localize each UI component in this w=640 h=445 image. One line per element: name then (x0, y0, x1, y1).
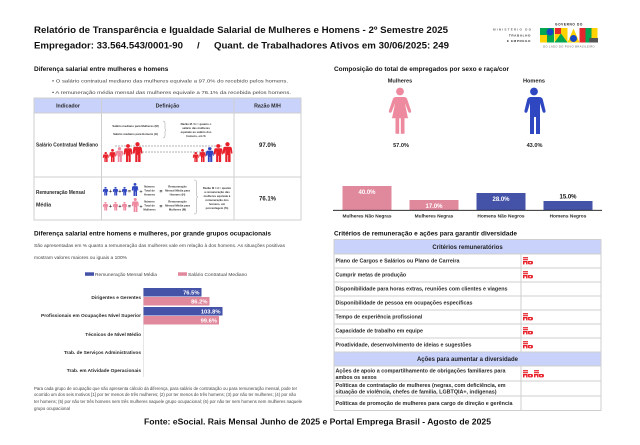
panel: proporção homens (523, 78, 546, 149)
diagram: remuneração média: Homens (H) (170, 192, 185, 196)
bar chart: ocupações (41, 288, 222, 377)
row label: remuneração: Média (36, 202, 51, 208)
value: 76,1%: 76.1% (259, 196, 277, 202)
bar chart: composição por raça/cor: 15.0% (559, 194, 577, 200)
bar chart: composição por raça/cor: 28.0% (492, 197, 510, 203)
icons: critérios adotados (523, 257, 544, 377)
diagram: salário mediano: equivale ao salário dos (181, 130, 212, 134)
diagram: remuneração média: = (160, 204, 163, 210)
footer: fonte: Fonte: eSocial. Rais Mensal Junho de 2025 e Portal Emprega Brasil - Agosto de 2025 (144, 416, 491, 426)
bar chart: composição por raça/cor: Mulheres Negras (415, 214, 454, 220)
bar chart: ocupações: 86.2% (191, 300, 208, 306)
diagram: remuneração média (103, 180, 231, 214)
diagram: remuneração média: + (109, 204, 112, 210)
bar chart: ocupações: Técnicos de Nível Médio (85, 332, 141, 338)
text block: nota (34, 386, 303, 411)
diagram: remuneração média: = (128, 204, 131, 210)
diagram: remuneração média: porcentagem (%) (206, 206, 228, 210)
diagram: salário mediano: salário das mulheres (182, 126, 210, 130)
heading: composição: Composição do total de empregados por sexo e raça/cor (334, 66, 509, 73)
text block: nota: ter homens; (5) por não ter três homens nem três mulheres naquele grupo ocupacional; (6) por não ter nem homens nem mulheres naquele (34, 399, 303, 404)
table rows: critérios (336, 259, 508, 349)
bar chart: composição por raça/cor (333, 186, 602, 220)
diagram: salário mediano: Salário mediano para Mulheres (M) (112, 124, 159, 128)
diagram: remuneração média: Homens (144, 192, 155, 196)
bar chart: ocupações: Trab. em Atividade Operacionais (67, 368, 141, 374)
panel: proporção mulheres: Mulheres (388, 78, 412, 84)
logo: ministério e governo (493, 22, 598, 49)
table rows: critérios: Cumprir metas de produção (336, 273, 407, 279)
table rows: ações: Ações de apoio a compartilhamento de obrigações familiares para (336, 368, 506, 374)
text block: bullets: • A remuneração média mensal das mulheres equivale a 76.1% da recebida pelos homens. (52, 90, 291, 96)
table rows: critérios: Plano de Cargos e Salários ou Plano de Carreira (336, 259, 460, 265)
diagram: remuneração média: Número (144, 184, 155, 188)
table header: Razão M/H (254, 104, 281, 110)
title: / (197, 40, 200, 52)
heading: diferença por ocupação: Diferença salarial entre homens e mulheres, por grande grupos ocupacionais (34, 230, 271, 238)
bar chart: composição por raça/cor: 17.0% (425, 204, 443, 210)
diagram: remuneração média: Total de (144, 188, 155, 192)
text block: bullets: • O salário contratual mediano das mulheres equivale a 97.0% do recebido pelos homens. (52, 78, 288, 84)
title (34, 25, 449, 52)
diagram: remuneração média: remuneração dos (205, 198, 229, 202)
diagram: remuneração média: ÷ (140, 204, 143, 210)
table rows: ações: situação de violência, chefes de família, LGBTQIA+, indígenas) (336, 390, 497, 396)
panel: proporção homens: Homens (523, 78, 545, 84)
table rows: ações: Políticas de promoção de mulheres para cargo de direção e gerência (336, 401, 513, 407)
table header: Definição (156, 104, 180, 110)
value: 97,0%: 97.0% (259, 143, 277, 149)
diagram: remuneração média: + (109, 189, 112, 195)
heading: diferença salarial: Diferença salarial entre mulheres e homens (34, 66, 169, 73)
diagram: remuneração média: Total de (144, 204, 155, 208)
icon: mulher (389, 88, 411, 134)
title: Empregador: 33.564.543/0001-90 (34, 40, 183, 52)
row label: remuneração: Remuneração Mensal (36, 190, 85, 196)
row label: remuneração (36, 190, 85, 208)
legend (85, 272, 247, 278)
legend: Remuneração Mensal Média (95, 272, 157, 278)
table rows: critérios: Tempo de experiência profissional (336, 315, 423, 321)
text block: descrição: mostram valores maiores ou iguais a 100% (34, 255, 128, 261)
bar chart: ocupações: Dirigentes e Gerentes (91, 295, 141, 301)
bar chart: ocupações: Trab. de Serviços Administrativos (64, 350, 141, 356)
panel: tabela de indicadores (34, 98, 301, 220)
logo: ministério e governo: GOVERNO DO (555, 22, 583, 26)
text block: nota: grupo ocupacional (34, 406, 70, 411)
bar chart: composição por raça/cor: Mulheres Não Negras (342, 214, 392, 220)
diagram: remuneração média: mulheres equivale à (204, 194, 231, 198)
panel: proporção homens: 43.0% (527, 143, 542, 149)
diagram: salário mediano: homens, em % (186, 134, 206, 138)
bar chart: composição por raça/cor: Homens Não Negros (477, 214, 525, 220)
title: Quant. de Trabalhadores Ativos em 30/06/2025: 249 (214, 40, 449, 52)
bar chart: ocupações: 76.5% (183, 290, 200, 296)
diagram: remuneração média: homens, em (209, 202, 226, 206)
diagram: remuneração média: = (128, 189, 131, 195)
table header: critérios: Critérios remuneratórios (432, 245, 503, 251)
text block: nota: Para cada grupo de ocupação que não apresenta cálculo da diferença, para salário de contratação ou para remuneração mensal, pode ter (34, 386, 298, 391)
diagram: remuneração média: + (119, 204, 122, 210)
logo: ministério e governo: E EMPREGO (507, 39, 531, 43)
table rows: ações: Políticas de contratação de mulheres (negras, com deficiência, em (336, 383, 506, 389)
logo: ministério e governo: MINISTÉRIO DO (493, 26, 532, 32)
table rows: critérios: Capacidade de trabalho em equipe (336, 329, 423, 335)
diagram: remuneração média: a remuneração das (204, 190, 230, 194)
table rows: ações: ambos os sexos (336, 375, 377, 381)
diagram: remuneração média: Mensal Média para (165, 204, 190, 208)
panel: proporção mulheres (388, 78, 412, 149)
bar chart: composição por raça/cor: 40.0% (358, 190, 376, 196)
table rows: ações (336, 368, 513, 407)
diagram: remuneração média: Número (144, 200, 155, 204)
diagram: remuneração média: Mulheres (143, 208, 156, 212)
diagram: salário mediano: Razão M / H = quanto o (181, 122, 212, 126)
table rows: critérios: Disponibilidade para horas extras, reuniões com clientes e viagens (336, 287, 508, 293)
bar chart: ocupações: 103.8% (201, 310, 220, 316)
diagram: salário mediano: Salário mediano para Homens (H) (113, 132, 158, 136)
text block: descrição: São apresentadas em % quanto a remuneração das mulheres vale em relação à dos homens. As situações positivas (34, 243, 286, 249)
bar chart: ocupações: 99.6% (201, 318, 217, 324)
panel: tabela de critérios (334, 240, 601, 411)
text block: bullets (52, 78, 291, 96)
diagram: remuneração média: Razão M / H = quanto (203, 186, 231, 190)
diagram: remuneração média: = (160, 189, 163, 195)
table rows: critérios: Proatividade, desenvolvimento de ideias e sugestões (336, 343, 472, 349)
text block: descrição (34, 243, 286, 261)
text block: nota: ocorrido um dos seis motivos [1] por ter menos de três mulheres; (2) por ter menos de três homens; (3) por não ter mulheres; (4) por não (34, 392, 297, 397)
title: Relatório de Transparência e Igualdade Salarial de Mulheres e Homens - 2º Semestre 2025 (34, 25, 449, 36)
diagram: remuneração média: Remuneração (168, 184, 187, 188)
table header (56, 104, 281, 110)
bar chart: composição por raça/cor: Homens Negros (550, 214, 587, 220)
icon: homem (524, 88, 546, 134)
panel: proporção mulheres: 57.0% (393, 143, 409, 149)
diagram: remuneração média: Mensal Média para (165, 188, 190, 192)
diagram: remuneração média: ÷ (140, 189, 143, 195)
heading: critérios: Critérios de remuneração e ações para garantir diversidade (334, 230, 517, 238)
bar chart: ocupações: Profissionais em Ocupações Nível Superior (41, 313, 141, 319)
diagram: remuneração média: Remuneração (168, 200, 187, 204)
logo: ministério e governo: TRABALHO (509, 34, 531, 38)
table header: Indicador (56, 104, 80, 110)
legend: Salário Contratual Mediano (188, 272, 247, 278)
diagram: salário mediano (103, 121, 232, 162)
table header: ações: Ações para aumentar a diversidade (417, 357, 519, 363)
diagram: remuneração média: Mulheres (M) (169, 208, 186, 212)
logo: ministério e governo: DO LADO DO POVO BRASILEIRO (543, 45, 595, 49)
table rows: critérios: Disponibilidade de pessoa em ocupações específicas (336, 301, 473, 307)
diagram: remuneração média: + (119, 189, 122, 195)
row label: salário contratual: Salário Contratual Mediano (36, 142, 99, 148)
